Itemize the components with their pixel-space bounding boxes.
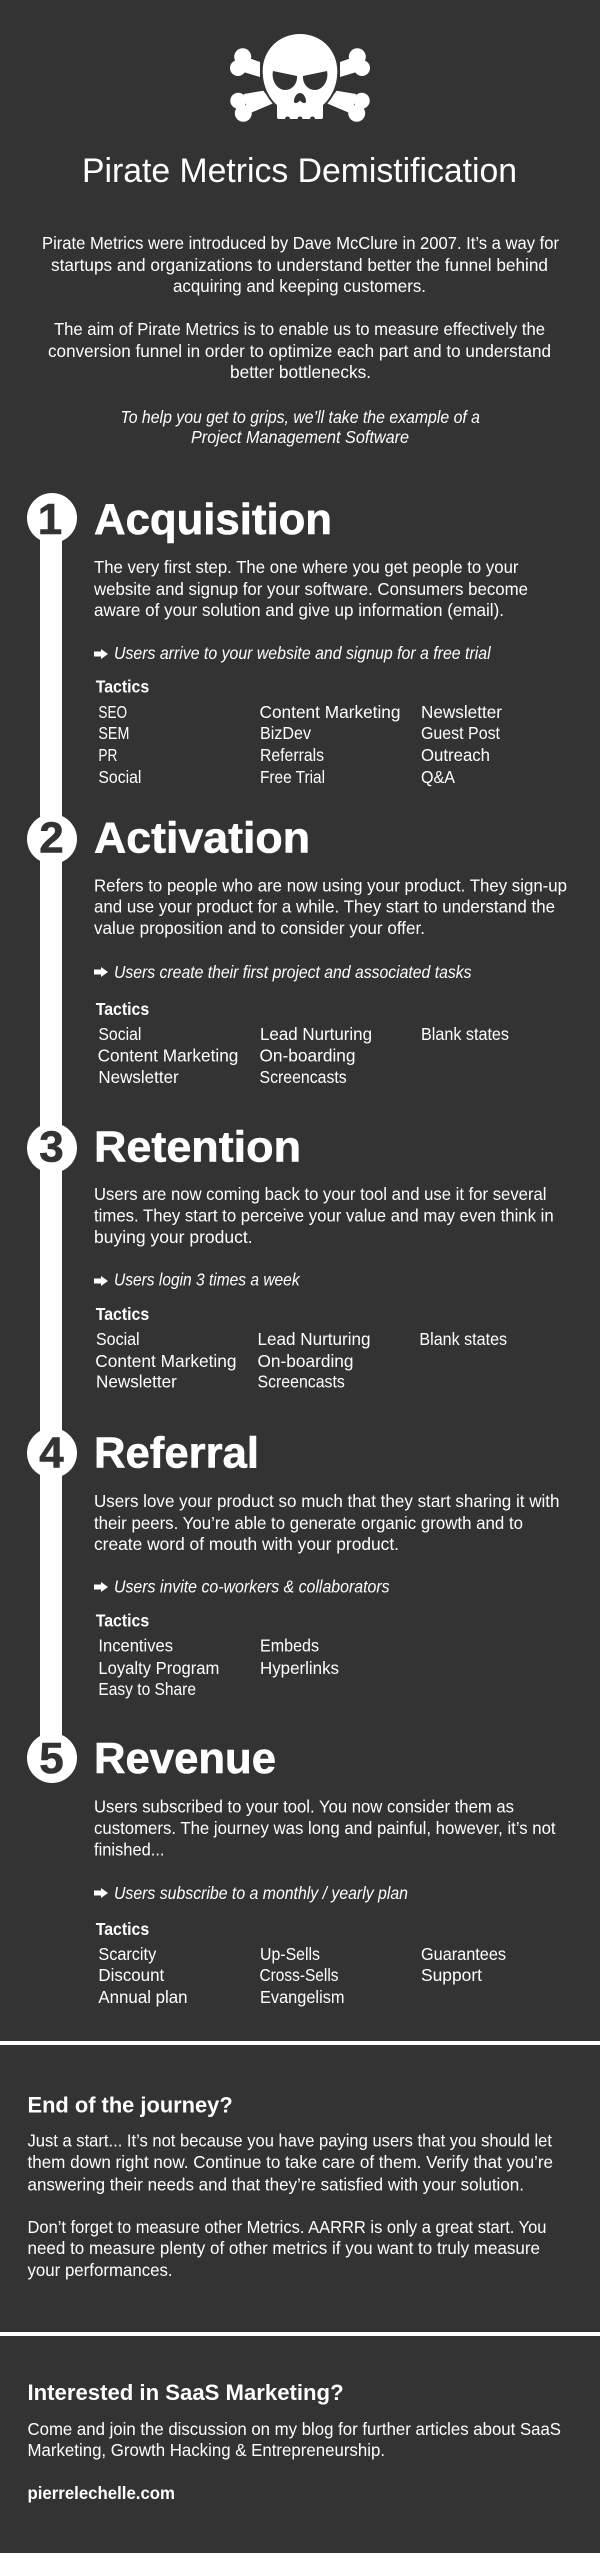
list: activation tactics: Content Marketing [98, 1046, 238, 1066]
text block: referral description: Users love your product so much that they start sharing it with [94, 1491, 560, 1511]
step number 4: 4 [39, 1429, 64, 1478]
text block: retention description: Users are now coming back to your tool and use it for several [94, 1184, 546, 1204]
list: revenue tactics: Scarcity [98, 1944, 156, 1964]
list: revenue tactics: Discount [98, 1965, 164, 1985]
list: activation tactics [98, 1024, 509, 1087]
list: revenue tactics: Support [421, 1965, 482, 1985]
text block: activation description: value proposition and to consider your offer. [94, 918, 425, 938]
icon: arrow [94, 1276, 108, 1286]
list: activation tactics: Lead Nurturing [260, 1024, 372, 1044]
list: retention tactics: Blank states [419, 1329, 507, 1349]
text block: activation description [94, 876, 567, 938]
text block: activation description: Refers to people who are now using your product. They sign-up [94, 876, 567, 896]
list: retention tactics [95, 1329, 507, 1392]
list: activation tactics: Blank states [421, 1024, 509, 1044]
heading: activation: Activation [94, 814, 310, 863]
list: acquisition tactics: Q&A [421, 767, 455, 787]
text block: introduction: To help you get to grips, we’ll take the example of a [120, 407, 480, 427]
heading: referral: Referral [94, 1429, 259, 1478]
list: activation tactics: On-boarding [260, 1046, 356, 1066]
text block: acquisition description [93, 557, 528, 620]
callout: revenue example: Users subscribe to a monthly / yearly plan [114, 1883, 408, 1903]
title: Pirate Metrics Demistification [82, 152, 517, 190]
step number 2 [27, 814, 77, 864]
text block: revenue description: finished... [94, 1840, 164, 1860]
list: referral tactics: Hyperlinks [260, 1658, 339, 1678]
text block: end of the journey body: Don’t forget to measure other Metrics. AARRR is only a great start. You [28, 2217, 546, 2237]
callout: acquisition example: Users arrive to your website and signup for a free trial [114, 643, 492, 663]
text block: introduction: better bottlenecks. [230, 362, 371, 382]
step number 1 [27, 493, 77, 544]
list: referral tactics: Easy to Share [98, 1679, 196, 1699]
text block: introduction: Project Management Software [191, 427, 409, 447]
list: revenue tactics: Guarantees [421, 1944, 506, 1964]
list: acquisition tactics: PR [98, 745, 117, 765]
text block: end of the journey body: need to measure plenty of other metrics if you want to truly measure [28, 2238, 540, 2258]
text block: revenue description: customers. The journey was long and painful, however, it’s not [94, 1818, 556, 1838]
text block: end of the journey body: Just a start... It’s not because you have paying users that you should let [28, 2131, 552, 2151]
list: referral tactics [98, 1636, 339, 1699]
text block: introduction: acquiring and keeping customers. [173, 276, 426, 296]
list: activation tactics: Screencasts [260, 1067, 347, 1087]
list: retention tactics: Social [96, 1329, 140, 1349]
list: revenue tactics: Evangelism [260, 1987, 344, 2007]
step number 2: 2 [39, 814, 64, 863]
heading: tactics: Tactics [96, 677, 149, 697]
list: referral tactics: Incentives [98, 1636, 173, 1656]
list: referral tactics: Embeds [260, 1636, 319, 1656]
icon: arrow [94, 967, 108, 977]
callout: activation example: Users create their first project and associated tasks [114, 962, 472, 982]
panel: retention [94, 1123, 554, 1392]
text block: introduction: startups and organizations to understand better the funnel behind [51, 255, 548, 275]
list: activation tactics: Newsletter [98, 1067, 179, 1087]
list: retention tactics: Screencasts [258, 1372, 345, 1392]
icon: skull and crossbones [230, 34, 370, 122]
heading: tactics: Tactics [96, 1304, 149, 1324]
panel: acquisition [93, 495, 528, 787]
heading: acquisition: Acquisition [94, 495, 332, 544]
callout: referral example: Users invite co-workers & collaborators [114, 1577, 390, 1597]
icon: arrow [94, 1888, 108, 1898]
panel: revenue [94, 1734, 556, 2007]
text block: retention description: buying your product. [94, 1227, 253, 1247]
text block: blog invitation: Marketing, Growth Hacking & Entrepreneurship. [28, 2440, 385, 2460]
step number 5 [27, 1733, 77, 1783]
text block: end of the journey body: answering their needs and that they’re satisfied with your solution. [28, 2175, 524, 2195]
list: retention tactics: On-boarding [258, 1351, 354, 1371]
step number 3 [27, 1123, 77, 1173]
text block: referral description: create word of mouth with your product. [94, 1534, 399, 1554]
list: revenue tactics: Cross-Sells [260, 1965, 339, 1985]
text block: blog invitation: Come and join the discussion on my blog for further articles about SaaS [28, 2419, 561, 2439]
list: acquisition tactics: SEM [98, 723, 129, 743]
list: acquisition tactics: SEO [98, 702, 127, 722]
text block: revenue description [94, 1797, 556, 1860]
icon: arrow [94, 649, 108, 659]
list: revenue tactics [98, 1944, 506, 2007]
list: retention tactics: Content Marketing [95, 1351, 236, 1371]
panel: activation [94, 814, 567, 1087]
heading: tactics: Tactics [96, 999, 149, 1019]
heading: tactics: Tactics [96, 1919, 149, 1939]
list: acquisition tactics: Outreach [421, 745, 490, 765]
heading: revenue: Revenue [94, 1734, 276, 1783]
text block: introduction: Pirate Metrics were introduced by Dave McClure in 2007. It’s a way for [42, 233, 559, 253]
text block: introduction: conversion funnel in order to optimize each part and to understand [48, 341, 551, 361]
text block: end of the journey body: them down right now. Continue to take care of them. Verify that you’re [28, 2152, 553, 2172]
icon: arrow [94, 1582, 108, 1592]
text block: blog invitation [28, 2419, 561, 2460]
text block: end of the journey body: your performances. [28, 2260, 173, 2280]
list: acquisition tactics: Content Marketing [260, 702, 400, 722]
link text: website: pierrelechelle.com [28, 2483, 175, 2503]
list: retention tactics: Newsletter [96, 1372, 177, 1392]
callout: retention example: Users login 3 times a week [114, 1270, 301, 1290]
text block: acquisition description: The very first step. The one where you get people to your [94, 557, 519, 577]
list: acquisition tactics: Guest Post [421, 723, 500, 743]
list: activation tactics: Social [98, 1024, 141, 1044]
step number 5: 5 [39, 1734, 64, 1783]
panel: interested in SaaS marketing [28, 2380, 561, 2503]
list: acquisition tactics [98, 702, 502, 787]
text block: acquisition description: website and signup for your software. Consumers become [93, 579, 528, 599]
list: acquisition tactics: Social [98, 767, 141, 787]
text block: retention description [94, 1184, 554, 1247]
step number 3: 3 [39, 1123, 64, 1172]
step number 4 [27, 1428, 77, 1478]
list: referral tactics: Loyalty Program [98, 1658, 219, 1678]
heading: retention: Retention [94, 1123, 301, 1172]
list: acquisition tactics: Newsletter [421, 702, 502, 722]
text block: retention description: times. They start to perceive your value and may even think in [94, 1206, 554, 1226]
list: acquisition tactics: BizDev [260, 723, 311, 743]
list: acquisition tactics: Referrals [260, 745, 324, 765]
step number 1: 1 [38, 495, 62, 544]
list: revenue tactics: Annual plan [98, 1987, 188, 2007]
text block: revenue description: Users subscribed to your tool. You now consider them as [94, 1797, 514, 1817]
panel: end of the journey [28, 2093, 553, 2280]
text block: referral description: their peers. You’re able to generate organic growth and to [94, 1513, 523, 1533]
timeline: vertical bar with numbered circles [27, 493, 77, 1783]
heading: end of the journey: End of the journey? [28, 2093, 233, 2118]
text block: end of the journey body [28, 2131, 553, 2280]
list: revenue tactics: Up-Sells [260, 1944, 320, 1964]
heading: tactics: Tactics [96, 1611, 149, 1631]
text block: acquisition description: aware of your solution and give up information (email). [94, 600, 504, 620]
list: acquisition tactics: Free Trial [260, 767, 325, 787]
text block: referral description [94, 1491, 560, 1554]
text block: activation description: and use your product for a while. They start to understand the [94, 897, 555, 917]
list: retention tactics: Lead Nurturing [258, 1329, 370, 1349]
text block: introduction: The aim of Pirate Metrics is to enable us to measure effectively the [54, 319, 545, 339]
heading: interested in SaaS marketing: Interested in SaaS Marketing? [28, 2380, 344, 2405]
text block: introduction [42, 233, 559, 447]
panel: referral [94, 1429, 560, 1699]
